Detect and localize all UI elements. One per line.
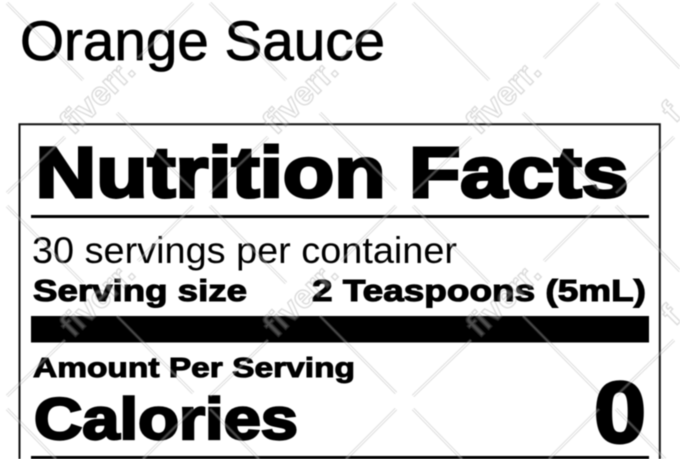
serving size value: 2 Teaspoons (5mL) — [312, 273, 646, 308]
watermark overlay: fiverr. — [52, 51, 142, 141]
servings per container: 30 servings per container — [32, 229, 457, 271]
watermark overlay: fiverr. — [255, 254, 345, 344]
calories value: 0 — [594, 365, 646, 459]
thick divider bar — [31, 316, 649, 342]
amount per serving: Amount Per Serving — [33, 352, 355, 383]
calories label: Calories — [34, 387, 298, 452]
heading: nutrition facts: Nutrition Facts — [36, 134, 628, 213]
watermark overlay: fiverr. — [458, 254, 548, 344]
serving size label: Serving size — [33, 273, 247, 308]
panel border — [20, 124, 660, 459]
watermark overlay: fiverr. — [458, 51, 548, 141]
heading rule — [31, 215, 649, 218]
watermark overlay: fiverr. — [255, 51, 345, 141]
watermark overlay: fiverr. — [52, 254, 142, 344]
bottom rule — [31, 456, 649, 459]
panel: nutrition facts label — [20, 124, 660, 459]
title: Orange Sauce — [20, 9, 385, 72]
